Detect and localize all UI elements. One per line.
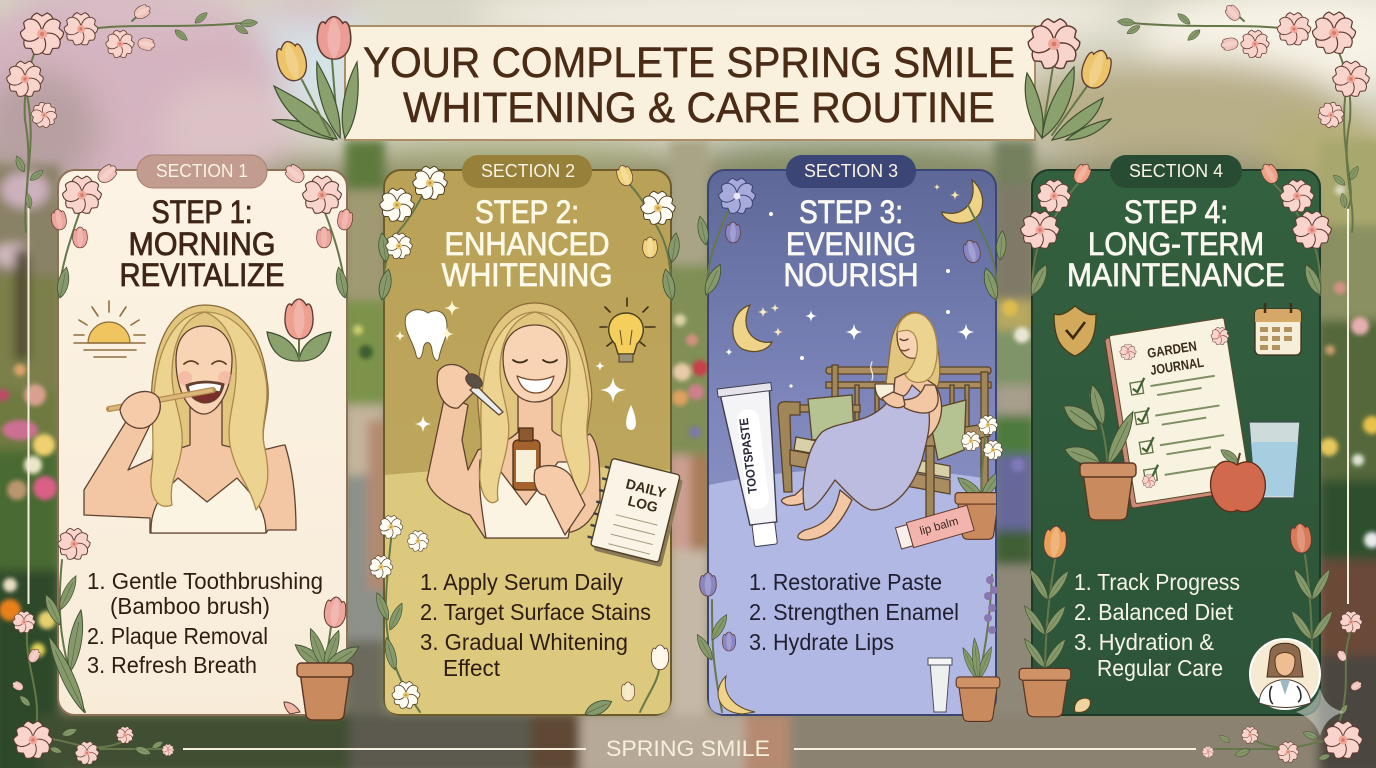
- heading: step 2: [442, 194, 612, 293]
- list: step 4: 1. Track Progress: [1074, 569, 1240, 595]
- left column: [0, 165, 60, 275]
- label: garden journal: JOURNAL: [1149, 355, 1205, 378]
- icon: crescent moon left: [733, 304, 783, 352]
- list: step 1: (Bamboo brush): [110, 593, 270, 619]
- icon: lip balm: [895, 505, 974, 551]
- list: step 2: [420, 569, 651, 681]
- label: toothpaste: TOOTSPASTE: [737, 417, 760, 494]
- list: step 1: 3. Refresh Breath: [87, 652, 257, 678]
- title banner: [345, 26, 1035, 140]
- list: step 1: 2. Plaque Removal: [87, 623, 268, 649]
- heading: step 3: EVENING: [786, 226, 916, 262]
- panel: step 1 morning revitalize: [41, 155, 362, 720]
- badge: section 1: SECTION 1: [156, 161, 248, 181]
- heading: step 2: ENHANCED: [444, 226, 610, 262]
- list: step 2: 1. Apply Serum Daily: [420, 569, 623, 595]
- floral corner: bottom left: [11, 611, 175, 766]
- icon: potted white flowers: [954, 434, 996, 540]
- label: daily log: [624, 475, 668, 515]
- illustration: woman with tea on bench: [782, 312, 942, 540]
- heading: step 4: LONG-TERM: [1088, 226, 1264, 262]
- floral: card 1 bottom left: [41, 528, 92, 715]
- label: garden journal: [1146, 338, 1205, 378]
- illustration: woman applying serum: [427, 303, 600, 538]
- icon: daily log notebook: [585, 457, 684, 567]
- icon: potted tulip: [284, 596, 362, 720]
- badge: section 2: [462, 155, 592, 188]
- label: lip balm: lip balm: [919, 515, 960, 538]
- bottom strip: [40, 714, 350, 768]
- heading: step 1: [120, 194, 284, 293]
- illustration: woman brushing teeth: [84, 305, 296, 533]
- list: step 4: Regular Care: [1097, 655, 1223, 681]
- badge: section 3: [786, 155, 916, 188]
- badge: section 4: [1110, 155, 1242, 188]
- floral corner: top left: [5, 2, 258, 232]
- illustration: garden bench: [778, 365, 991, 518]
- floral: card 4 top: [1019, 161, 1333, 297]
- floral: card 2 bottom right: [582, 645, 669, 719]
- decorative frame line: [28, 208, 1348, 749]
- list: step 1: [87, 568, 323, 678]
- icon: toothpaste tube: [717, 383, 790, 549]
- list: step 2: 3. Gradual Whitening: [420, 629, 628, 655]
- heading: step 4: [1067, 194, 1285, 293]
- heading: step 1: STEP 1:: [152, 194, 252, 230]
- floral: card 2 top: [377, 163, 681, 301]
- icon: sparkles and drop: [414, 361, 636, 432]
- icon: tooth: [394, 300, 460, 360]
- potted tulip: card 4 bottom left: [1019, 525, 1090, 717]
- heading: step 1: REVITALIZE: [120, 257, 284, 293]
- heading: step 3: NOURISH: [784, 257, 918, 293]
- badge: section 4: SECTION 4: [1129, 161, 1223, 181]
- ground tint: [709, 469, 995, 714]
- heading: step 3: STEP 3:: [799, 194, 903, 230]
- label: daily log: DAILY: [624, 475, 668, 501]
- icon: doctor portrait: [1250, 639, 1320, 709]
- floral: card 3 bottom left: [694, 573, 755, 714]
- watermark sparkle: [1296, 688, 1344, 736]
- list: step 2: 2. Target Surface Stains: [420, 599, 651, 625]
- icon: potted plant: [1059, 383, 1138, 520]
- icon: water glass: [1249, 422, 1300, 498]
- icon: crescent moon top: [934, 180, 983, 223]
- floral corner: top right: [1117, 2, 1371, 232]
- heading: step 3: [784, 194, 918, 293]
- floral corner: bottom right: [1201, 611, 1364, 764]
- list: step 2: Effect: [443, 655, 501, 681]
- heading: step 1: MORNING: [128, 226, 276, 262]
- list: step 4: 3. Hydration &: [1074, 629, 1214, 655]
- list: step 3: [749, 569, 959, 655]
- list: step 1: 1. Gentle Toothbrushing: [87, 568, 323, 594]
- title right tulips: [1025, 19, 1115, 140]
- floral: card 1 top: [50, 161, 354, 299]
- heading: step 2: WHITENING: [442, 257, 612, 293]
- list: step 4: 2. Balanced Diet: [1074, 599, 1234, 625]
- heading: step 4: MAINTENANCE: [1067, 257, 1285, 293]
- floral: card 2 bottom left: [368, 515, 430, 712]
- panel: step 3 evening nourish: [694, 155, 1007, 721]
- list: step 3: 1. Restorative Paste: [749, 569, 942, 595]
- right column: [1318, 140, 1376, 225]
- list: step 3: 3. Hydrate Lips: [749, 629, 894, 655]
- icon: light bulb: [600, 298, 655, 362]
- badge: section 3: SECTION 3: [804, 161, 898, 181]
- title text line 2: WHITENING & CARE ROUTINE: [403, 84, 995, 132]
- gap 2 colours: [669, 140, 709, 265]
- icon: calendar: [1255, 303, 1301, 355]
- title left tulips: [273, 17, 358, 140]
- badge: section 1: [137, 155, 267, 188]
- label: garden journal: GARDEN: [1146, 338, 1198, 361]
- icon: rising sun: [74, 301, 145, 357]
- ground tint: [385, 467, 670, 714]
- heading: step 2: STEP 2:: [475, 194, 579, 230]
- heading: step 4: STEP 4:: [1124, 194, 1228, 230]
- icon: tulip: [267, 299, 331, 361]
- illustration: garden journal: [1104, 318, 1251, 508]
- stars: [725, 212, 974, 388]
- white flowers over pot: [960, 415, 1004, 461]
- label: daily log: LOG: [626, 492, 660, 515]
- icon: apple: [1211, 446, 1265, 512]
- title text line 1: YOUR COMPLETE SPRING SMILE: [363, 39, 1015, 87]
- gap 1 colours: [345, 140, 385, 190]
- footer label: spring smile: SPRING SMILE: [606, 736, 770, 761]
- icon: lavender pot and small tube: [928, 575, 1000, 721]
- panel: step 2 enhanced whitening: [368, 155, 684, 719]
- gap 3 colours: [994, 140, 1034, 185]
- tulip stem: card 4 right: [1288, 523, 1336, 660]
- list: step 3: 2. Strengthen Enamel: [749, 599, 959, 625]
- list: step 4: [1074, 569, 1240, 681]
- icon: shield: [1054, 306, 1096, 356]
- floral: card 3 top: [695, 178, 1007, 302]
- panel: step 4 long-term maintenance: [1019, 155, 1336, 717]
- badge: section 2: SECTION 2: [481, 161, 575, 181]
